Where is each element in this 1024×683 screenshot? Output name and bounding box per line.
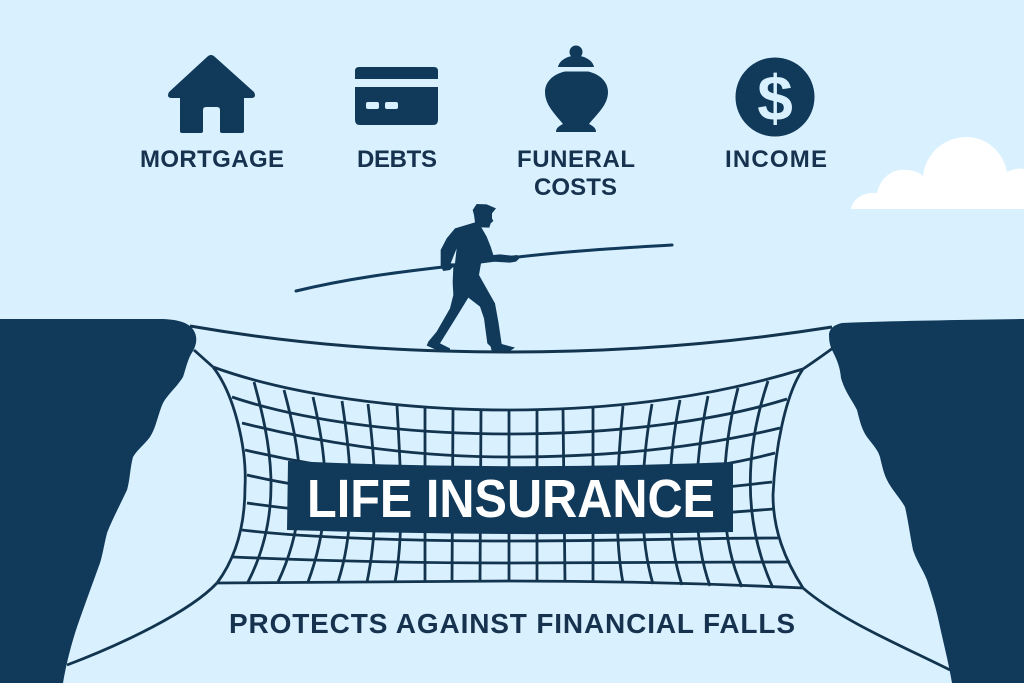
panel: mortgage <box>140 55 284 173</box>
tightrope <box>190 326 832 352</box>
safety net <box>67 348 950 670</box>
icon: cloud <box>851 137 1024 209</box>
panel: debts <box>355 67 438 173</box>
tightrope walker with balance pole <box>296 204 672 351</box>
walker silhouette <box>427 204 519 351</box>
icon: urn <box>545 46 608 132</box>
icon: dollar coin: $ <box>757 62 793 134</box>
icon: house <box>168 55 255 133</box>
net columns <box>248 381 773 588</box>
label: mortgage: MORTGAGE <box>140 146 284 173</box>
right cliff <box>829 319 1024 683</box>
label: income: INCOME <box>725 146 827 173</box>
balance pole <box>296 245 672 291</box>
net rows <box>232 397 790 563</box>
label: funeral costs: COSTS <box>534 174 617 201</box>
net outline <box>213 367 803 588</box>
panel: funeral costs <box>517 46 635 201</box>
tagline: PROTECTS AGAINST FINANCIAL FALLS <box>229 608 795 639</box>
banner: life insurance: LIFE INSURANCE <box>307 469 715 529</box>
label: funeral costs: FUNERAL <box>517 146 635 173</box>
left cliff <box>0 319 196 683</box>
panel: income <box>725 58 827 173</box>
label: debts: DEBTS <box>357 146 437 173</box>
net anchor ropes <box>67 348 950 670</box>
icon: credit card <box>355 67 438 125</box>
label: funeral costs <box>517 146 635 201</box>
